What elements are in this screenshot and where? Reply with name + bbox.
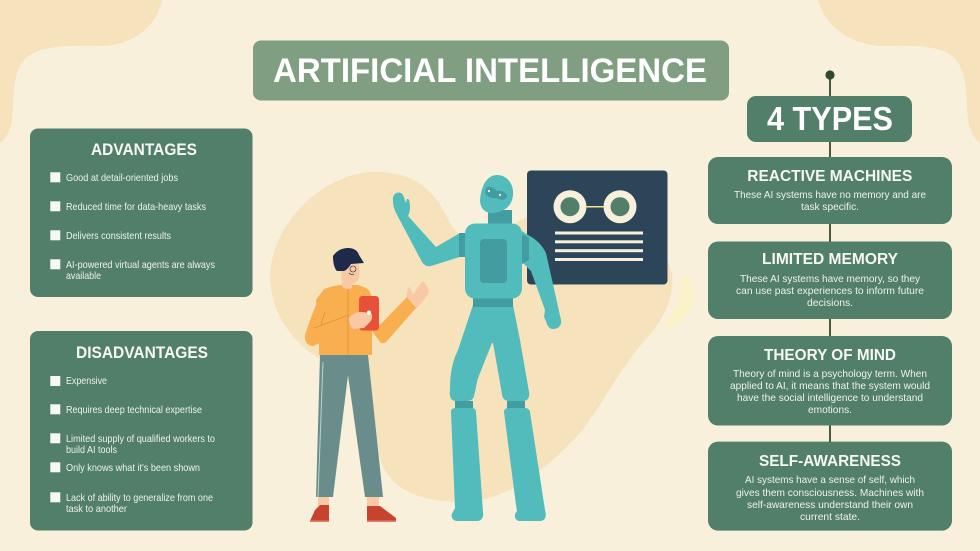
panel: disadvantages xyxy=(30,331,252,530)
card: theory of mind: THEORY OF MIND xyxy=(764,347,896,364)
list item: qualified workers xyxy=(50,433,215,456)
faint yellow crescent xyxy=(666,275,695,328)
robot torso xyxy=(473,296,513,307)
heading: disadvantages: DISADVANTAGES xyxy=(76,344,208,362)
robot legs xyxy=(450,305,529,401)
robot head xyxy=(480,175,513,213)
card: limited memory: LIMITED MEMORY xyxy=(762,251,899,268)
person right arm and hand xyxy=(406,281,429,310)
connector line with dot xyxy=(825,70,835,443)
card: self-awareness: current state. xyxy=(800,512,860,523)
robot left arm xyxy=(393,193,466,266)
card: reactive machines xyxy=(708,157,952,224)
list item: technical expertise: Requires deep technical expertise xyxy=(66,405,202,416)
panel: advantages xyxy=(30,128,252,297)
title banner: ARTIFICIAL INTELLIGENCE xyxy=(273,52,707,90)
person jacket xyxy=(316,285,372,355)
card: reactive machines: REACTIVE MACHINES xyxy=(747,168,912,185)
person shoes xyxy=(310,505,329,522)
card: limited memory: decisions. xyxy=(807,298,853,309)
person phone xyxy=(359,296,379,330)
list item: generalize: Lack of ability to generalize from one xyxy=(66,493,213,504)
card: self-awareness xyxy=(708,442,952,531)
list item: expensive xyxy=(50,376,107,387)
card: theory of mind xyxy=(708,336,952,426)
illustration: screen xyxy=(527,170,668,284)
list item: virtual agents: AI-powered virtual agents are always xyxy=(66,260,215,271)
heading: 4 types xyxy=(747,96,912,142)
list item: generalize xyxy=(50,492,213,515)
card: limited memory: can use past experiences to inform future xyxy=(736,286,924,297)
card: limited memory xyxy=(708,242,952,319)
illustration: person xyxy=(305,248,429,522)
list item: consistent results: Delivers consistent results xyxy=(66,231,171,242)
person hand on phone xyxy=(349,312,372,329)
card: self-awareness: AI systems have a sense of self, which xyxy=(745,475,915,486)
corner blob: top left xyxy=(0,0,162,143)
list item: generalize: task to another xyxy=(66,504,127,515)
card: self-awareness: self-awareness understand their own xyxy=(747,500,913,511)
card: reactive machines: These AI systems have no memory and are xyxy=(734,190,926,201)
list item: reduced time: Reduced time for data-heavy tasks xyxy=(66,202,206,213)
list item: detail-oriented: Good at detail-oriented jobs xyxy=(66,173,178,184)
card: limited memory: These AI systems have memory, so they xyxy=(740,274,921,285)
card: theory of mind: have the social intelligence to understand xyxy=(737,393,923,404)
title banner xyxy=(253,40,729,100)
person trousers xyxy=(316,355,383,497)
person head xyxy=(341,262,360,289)
card: theory of mind: applied to AI, it means that the system would xyxy=(730,381,930,392)
illustration backdrop blob xyxy=(270,172,672,502)
list item: expensive: Expensive xyxy=(66,376,107,387)
illustration: robot xyxy=(393,175,561,521)
list item: qualified workers: Limited supply of qualified workers to xyxy=(66,434,215,445)
robot right arm xyxy=(522,231,561,329)
card: self-awareness: SELF-AWARENESS xyxy=(759,453,901,470)
list item: virtual agents: available xyxy=(66,271,101,282)
list item: virtual agents xyxy=(50,259,215,282)
corner blob: top right xyxy=(818,0,980,143)
heading: advantages: ADVANTAGES xyxy=(91,141,197,159)
card: reactive machines: task specific. xyxy=(801,202,859,213)
heading: 4 types: 4 TYPES xyxy=(767,100,893,137)
card: theory of mind: Theory of mind is a psychology term. When xyxy=(733,369,927,380)
list item: only knows: Only knows what it's been shown xyxy=(66,463,200,474)
list item: qualified workers: build AI tools xyxy=(66,445,117,456)
card: theory of mind: emotions. xyxy=(808,405,852,416)
card: self-awareness: gives them consciousness. Machines with xyxy=(736,488,924,499)
